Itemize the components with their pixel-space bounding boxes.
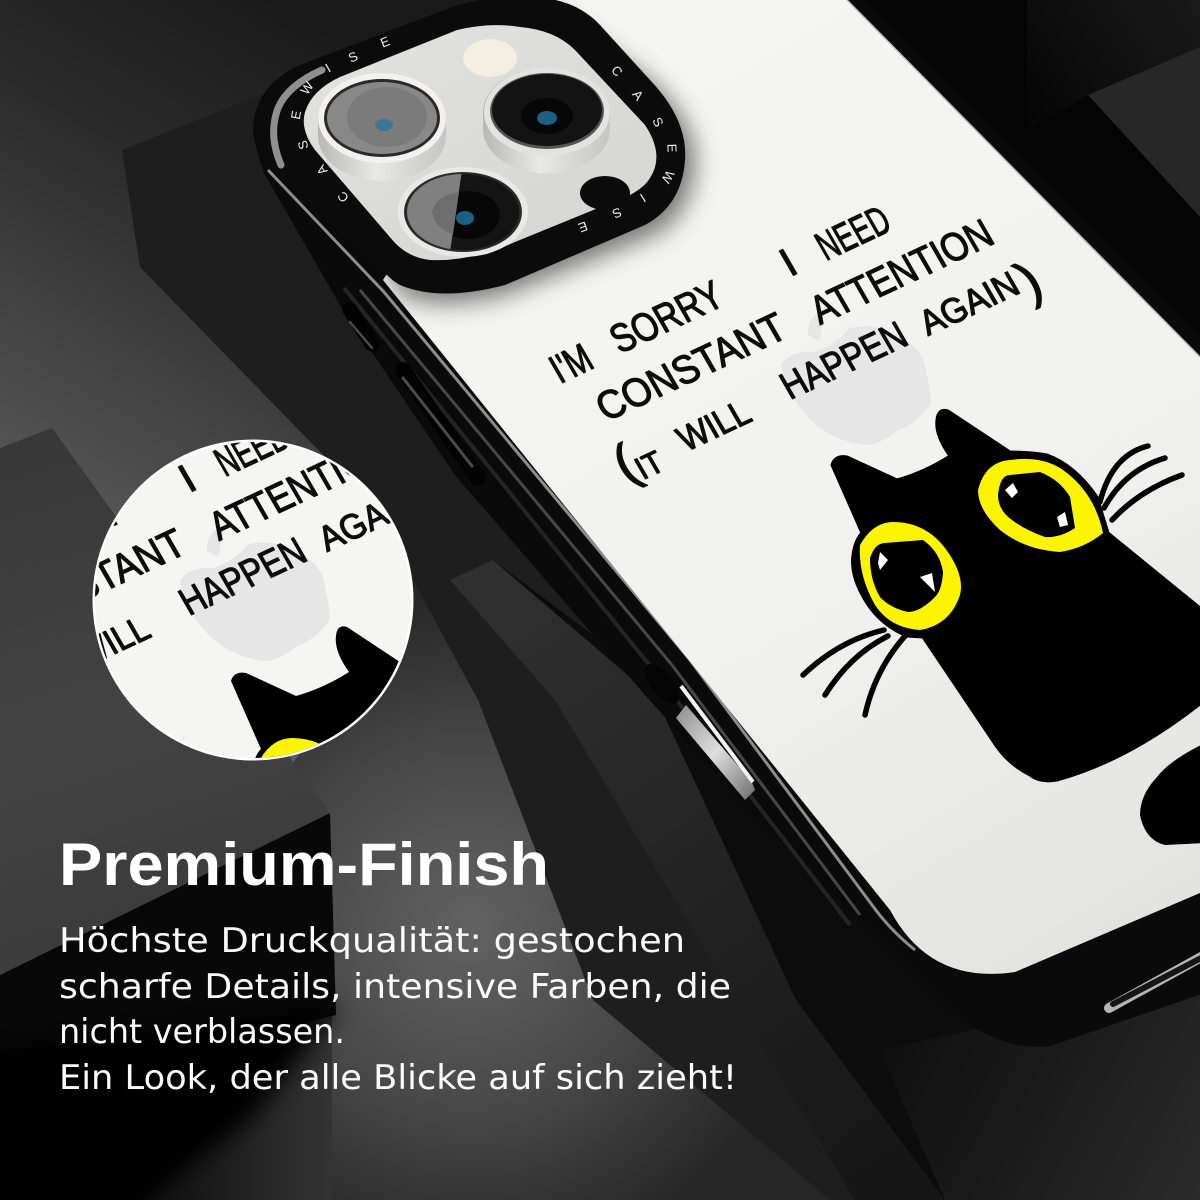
cat tail xyxy=(1140,743,1200,845)
handwritten quote: IT xyxy=(628,444,670,486)
mid strip xyxy=(450,560,945,1200)
lit panel xyxy=(293,580,860,1200)
zoomed quote: SORRY xyxy=(0,488,130,578)
zoom circle xyxy=(92,440,414,760)
phone xyxy=(253,0,1200,1047)
lens right xyxy=(483,68,610,173)
cat body xyxy=(832,410,1200,781)
body text xyxy=(59,921,737,1098)
CASEWISE ring lettering: C xyxy=(608,63,626,79)
CASEWISE ring lettering: W xyxy=(658,168,678,187)
handwritten quote: ATTENTION xyxy=(801,210,1001,333)
clear band xyxy=(274,70,322,165)
zoomed quote: WILL xyxy=(68,608,157,675)
zoomed cat xyxy=(231,626,399,758)
handwritten quote: AGAIN xyxy=(911,263,1026,343)
left lower block xyxy=(0,428,330,975)
dark block side xyxy=(0,813,336,1095)
CASEWISE ring lettering xyxy=(288,33,680,236)
left floor xyxy=(0,1000,332,1200)
zoomed quote: HAPPEN xyxy=(172,530,314,624)
lidar xyxy=(580,176,630,210)
handwritten quote: NEED xyxy=(807,197,898,269)
CASEWISE ring lettering: I xyxy=(323,61,333,75)
button volume xyxy=(403,370,478,478)
phone back xyxy=(383,0,1200,974)
zoomed quote: I xyxy=(170,456,204,501)
body text: nicht verblassen. xyxy=(59,1012,345,1052)
handwritten quote: ) xyxy=(1006,251,1052,310)
zoomed apple logo xyxy=(180,524,330,661)
body text: scharfe Details, intensive Farben, die xyxy=(59,967,731,1007)
back edge highlight xyxy=(847,0,1200,357)
body text: Ein Look, der alle Blicke auf sich zieht! xyxy=(59,1058,737,1098)
button side silver xyxy=(639,658,755,800)
CASEWISE ring lettering: E xyxy=(378,33,392,51)
CASEWISE ring lettering: S xyxy=(649,115,667,130)
flash xyxy=(463,39,517,77)
USB port xyxy=(1109,955,1200,1008)
handwritten quote xyxy=(541,197,1052,493)
handwritten quote: SORRY xyxy=(601,272,731,362)
lens left xyxy=(318,73,446,181)
cat left eye xyxy=(860,522,961,630)
handwritten quote: I'M xyxy=(541,335,601,392)
handwritten quote: HAPPEN xyxy=(773,314,915,408)
CASEWISE ring lettering: E xyxy=(576,218,590,236)
handwritten quote: I xyxy=(771,240,805,285)
handwritten quote: ( xyxy=(602,434,648,493)
CASEWISE ring lettering: A xyxy=(629,87,647,103)
phone side gloss lines xyxy=(268,170,915,950)
button upper xyxy=(350,310,372,348)
main block face xyxy=(122,93,1000,1200)
shadow under phone xyxy=(493,560,1000,1200)
top right block xyxy=(1088,47,1200,217)
lens bottom xyxy=(398,167,530,260)
apple logo ghost xyxy=(781,308,930,445)
handwritten quote: CONSTANT xyxy=(587,304,794,430)
CASEWISE ring lettering: I xyxy=(637,191,649,205)
cat whiskers xyxy=(803,446,1182,715)
CASEWISE ring lettering: C xyxy=(334,189,352,205)
handwritten quote: WILL xyxy=(669,392,758,459)
CASEWISE ring lettering: S xyxy=(610,204,624,222)
CASEWISE ring lettering: E xyxy=(288,109,304,121)
CASEWISE ring lettering: E xyxy=(664,143,680,153)
zoomed quote: ATTENTION xyxy=(200,426,400,549)
cat right eye xyxy=(978,459,1103,552)
heading: Premium-Finish xyxy=(59,831,549,898)
zoomed artwork xyxy=(95,442,399,758)
zoomed quote xyxy=(95,442,391,659)
body text: Höchste Druckqualität: gestochen xyxy=(59,921,685,961)
CASEWISE ring lettering: A xyxy=(313,162,331,178)
camera plate xyxy=(304,25,656,260)
camera island xyxy=(253,0,685,294)
bottom right floor xyxy=(880,980,1200,1200)
cat illustration xyxy=(803,410,1200,845)
phone body xyxy=(253,0,1200,1047)
top right dark area xyxy=(860,0,1200,400)
zoomed quote: AGAIN xyxy=(310,479,425,559)
CASEWISE ring lettering: W xyxy=(297,78,317,97)
island shadow xyxy=(383,0,712,321)
zoomed quote: NEED xyxy=(206,413,297,485)
CASEWISE ring lettering: S xyxy=(346,48,360,66)
CASEWISE ring lettering: S xyxy=(295,139,311,151)
